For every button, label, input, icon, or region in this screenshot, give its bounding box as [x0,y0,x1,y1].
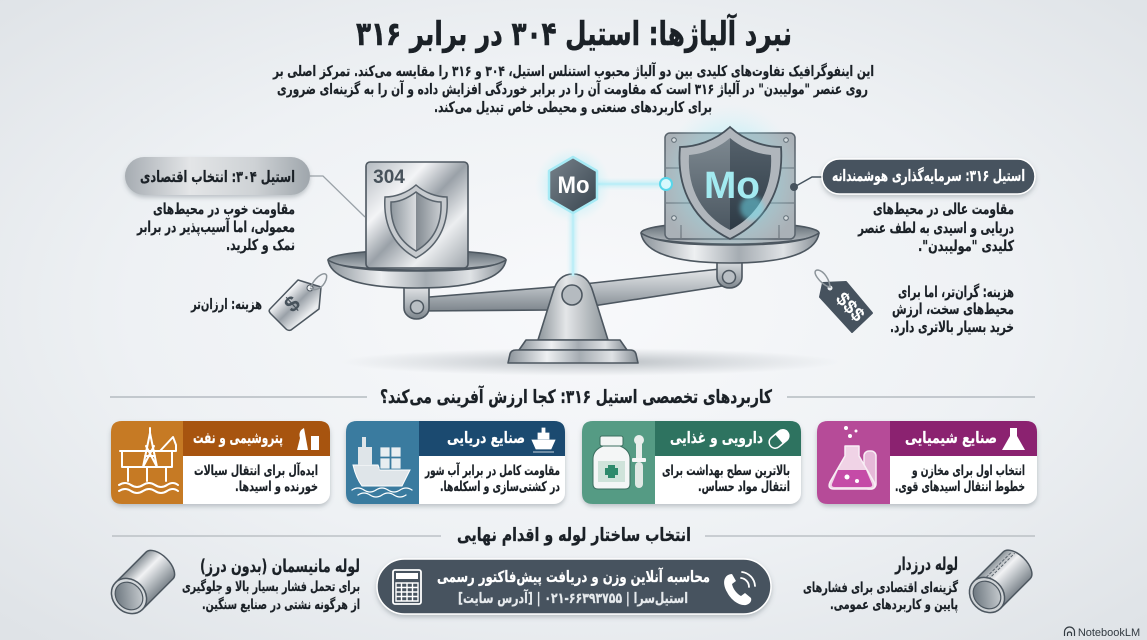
316 cost: محیط‌های سخت، ارزش [892,300,1014,318]
icon: seamless pipe [104,545,180,621]
scale illustration [125,104,1035,376]
steel 316 pill [822,159,1035,194]
floor shadow [340,348,840,376]
304 description [136,200,295,254]
steel 304 pill: استیل ۳۰۴: انتخاب اقتصادی [140,168,295,186]
304 steel block [366,162,468,268]
label 304: 304 [373,167,405,188]
card: chemical: خطوط انتقال اسیدهای قوی. [895,479,1025,495]
icon: expensive price tag: $$$ [831,289,868,326]
left pan back [328,250,506,270]
icon: flask and test tube [829,426,876,489]
right hanger [717,258,742,288]
icon: cheap price tag [269,274,327,330]
icon: expensive price tag [815,270,872,332]
seamless pipe: از هرگونه نشتی در صنایع سنگین. [202,596,360,613]
icon: cheap price tag: $ [279,290,305,317]
316 description: دریایی و اسیدی به لطف عنصر [857,219,1014,237]
card: petrochemical and oil: ایده‌آل برای انتقال سیالات [194,462,318,479]
304 description: مقاومت خوب در محیط‌های [153,200,295,218]
icon: capsule [767,427,791,451]
card: petrochemical and oil [111,421,330,504]
left pan bowl [328,260,506,288]
icon: cargo ship [352,437,412,497]
intro text: این اینفوگرافیک تفاوت‌های کلیدی بین دو آلیاژ محبوب استنلس استیل، ۳۰۴ و ۳۱۶ را مقایسه می‌کند. تمرکز اصلی بر [272,62,874,80]
steel 304 pill [125,157,310,195]
seamless pipe: برای تحمل فشار بسیار بالا و جلوگیری [182,578,360,595]
title: نبرد آلیاژها: استیل ۳۰۴ در برابر ۳۱۶ [356,13,792,54]
applications heading: کاربردهای تخصصی استیل ۳۱۶: کجا ارزش آفرینی می‌کند؟ [380,385,772,408]
icon: calculator [393,570,421,604]
icon: oil rig [119,428,178,493]
316 cost [890,283,1014,336]
icon: refinery [297,428,319,450]
molybdenum lines [573,184,666,276]
right pan bowl [641,233,819,263]
316 cost: خرید بسیار بالاتری دارد. [890,318,1014,336]
card: chemical: انتخاب اول برای مخازن و [911,463,1025,479]
structure heading: انتخاب ساختار لوله و اقدام نهایی [457,525,691,546]
icon: ship small [532,428,555,452]
card: marine [346,421,565,504]
seamless pipe: لوله مانیسمان (بدون درز) [200,557,360,577]
left hanger [404,285,429,319]
connector: 304 [310,176,365,217]
welded pipe: گزینه‌ای اقتصادی برای فشارهای [803,579,958,596]
card: pharma and food: دارویی و غذایی [670,429,763,447]
304 cost: هزینه: ارزان‌تر [190,297,262,313]
icon: flask small [1002,428,1025,450]
connector: 316 [790,177,823,191]
Mo hexagon [535,147,611,223]
intro text: برای کاربردهای صنعتی و محیطی خاص تبدیل می‌کند. [434,100,712,116]
welded pipe [803,545,1037,620]
card: pharma and food: بالاترین سطح بهداشت برای [662,463,790,479]
shield [385,185,447,258]
316 description [857,200,1014,255]
card: petrochemical and oil: پتروشیمی و نفت [193,429,283,448]
card: petrochemical and oil: خورنده و اسیدها. [235,479,318,495]
scale beam [417,268,729,311]
scale stand [508,274,638,363]
card: marine: صنایع دریایی [447,429,525,447]
Mo shield [658,104,802,256]
icon: medicine bottle and dropper [593,435,646,489]
right pan back [641,222,819,244]
NotebookLM badge: NotebookLM [1078,627,1140,639]
icon: welded pipe [962,545,1037,620]
316 description: کلیدی "مولیبدن". [918,237,1014,255]
call to action pill [377,559,771,614]
Mo shield: Mo [704,165,760,207]
card: chemical [817,421,1037,504]
316 steel plate [665,133,795,239]
seamless pipe [104,545,360,621]
card: marine: مقاومت کامل در برابر آب شور [424,462,560,479]
card: chemical: صنایع شیمیایی [905,429,997,447]
cyan node [660,178,672,190]
304 description: نمک و کلرید. [226,236,295,254]
304 description: معمولی، اما آسیب‌پذیر در برابر [136,218,295,237]
card: pharma and food: انتقال مواد حساس. [698,479,790,495]
call to action pill: محاسبه آنلاین وزن و دریافت پیش‌فاکتور رسمی [437,567,710,587]
316 cost: هزینه: گران‌تر، اما برای [898,283,1014,301]
316 description: مقاومت عالی در محیط‌های [873,200,1014,218]
intro text [272,62,874,116]
steel 316 pill: استیل ۳۱۶: سرمایه‌گذاری هوشمندانه [832,166,1025,185]
Mo hexagon: Mo [558,172,590,199]
welded pipe: لوله درزدار [894,555,958,575]
call to action pill: استیل‌سرا | ‎۰۲۱-۶۶۳۹۳۷۵۵‎ | [آدرس سایت] [458,589,688,607]
intro text: روی عنصر "مولیبدن" در آلیاژ ۳۱۶ است که مقاومت آن را در برابر خوردگی افزایش داده و آن را به گزینه‌ای ضروری [277,80,868,98]
icon: phone [724,572,755,605]
welded pipe: پایین و کاربردهای عمومی. [830,597,958,613]
card: pharma and food [582,421,801,504]
card: marine: در کشتی‌سازی و اسکله‌ها. [440,479,560,495]
